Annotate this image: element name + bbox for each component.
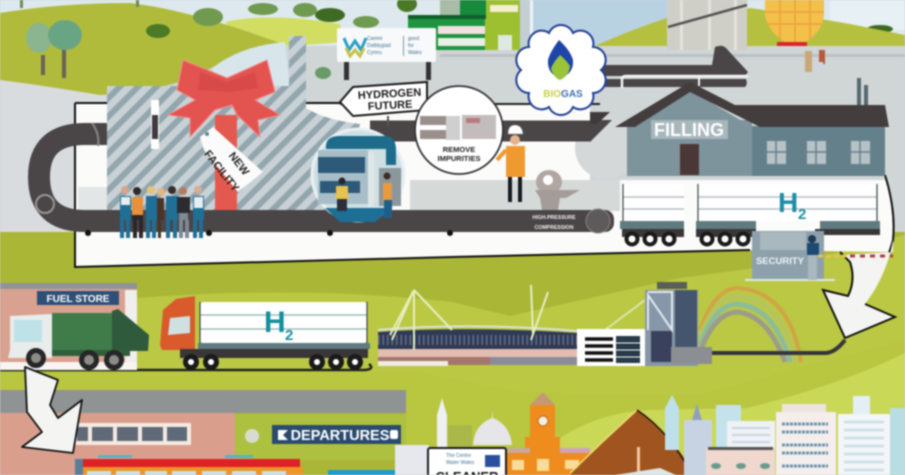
factory: hatched new facility wrapped as gift [107, 36, 360, 210]
pipe joints and valves [36, 123, 614, 236]
gift tag: new facility: NEW [226, 150, 251, 178]
logo sign: water company: for [408, 43, 414, 49]
sign: hydrogen future [340, 82, 427, 126]
bin lorry [8, 309, 149, 368]
big white arrow left [22, 367, 82, 453]
person 1 [120, 186, 131, 238]
tube trailers with H2: 2 [798, 206, 806, 223]
wheels [186, 356, 360, 368]
guard [807, 235, 819, 280]
hydrogen tube truck: H [264, 306, 286, 339]
person 2 [132, 187, 143, 238]
hills top left [0, 3, 345, 95]
stadium [378, 285, 645, 366]
brown sail roof [570, 410, 695, 475]
ribbon [215, 115, 237, 210]
sign: cleaner: Water Wales [446, 460, 475, 466]
compressor machine: COMPRESSION [535, 225, 574, 231]
tower building [645, 282, 712, 366]
circle inset: remove impurities [415, 86, 503, 174]
person 7 [193, 186, 204, 238]
tube trailers with H2: H [778, 187, 798, 218]
logo sign: water company: Wales [408, 50, 422, 56]
rainbow [700, 288, 801, 362]
barrier [818, 254, 893, 258]
top right hills, tower and balloon [595, 0, 905, 73]
sign: departures: DEPARTURES [291, 428, 390, 444]
person 3 [146, 186, 157, 238]
sign: cleaner: The Centre [446, 453, 471, 459]
circle inset: remove impurities: REMOVE [443, 145, 475, 154]
staff group [120, 186, 204, 238]
logo sign: water company: Cymru [367, 50, 382, 56]
wheels [28, 350, 122, 368]
logo sign: water company: Datblygiad [367, 43, 391, 49]
green building top [408, 0, 533, 50]
security gatehouse: SECURITY [756, 256, 805, 267]
hydrogen tube truck [160, 296, 370, 368]
gift tag: new facility: FACILITY [201, 148, 241, 195]
bus [75, 455, 303, 475]
wheels [626, 234, 748, 244]
people on path [805, 50, 825, 73]
filling station building: FILLING [654, 120, 724, 140]
bus depot [0, 390, 416, 475]
sign: departures [272, 425, 401, 444]
biogas cloud badge: BIOGAS [543, 89, 583, 100]
city skyline: landmarks [395, 392, 905, 475]
filling station building [615, 78, 889, 176]
person 6 [177, 187, 190, 238]
person 5 [166, 186, 178, 238]
sign: hydrogen future: FUTURE [368, 99, 413, 113]
gift tag: new facility [200, 127, 263, 195]
logo sign: water company [337, 28, 436, 80]
compressor machine [532, 170, 580, 231]
sign: hydrogen future: HYDROGEN [358, 87, 422, 102]
clock tower [505, 392, 595, 475]
compressor machine: HIGH-PRESSURE [532, 215, 576, 221]
tube trailers with H2 [620, 184, 880, 244]
sign: fuel store: FUEL STORE [47, 294, 110, 305]
arrow: dark pipe to filling [590, 46, 748, 124]
biogas cloud badge [516, 25, 606, 115]
icon: flame [548, 40, 573, 80]
trees and bushes [20, 0, 893, 79]
big white arrow right [823, 240, 895, 338]
pipe loop: dark gas pipeline [39, 120, 612, 221]
circle inset: remove impurities: IMPURITIES [438, 154, 480, 163]
red bow [168, 60, 280, 137]
city buildings [665, 395, 905, 475]
engineer figure [497, 125, 525, 202]
sign: cleaner [428, 448, 506, 475]
road line [0, 364, 371, 370]
pipe line to arrow [712, 340, 845, 353]
fuel store building [0, 283, 137, 370]
logo sign: water company: Cwmni [367, 36, 382, 42]
person 4 [157, 188, 165, 238]
frame: white process area [75, 103, 894, 300]
icon: hot air balloon [765, 0, 824, 46]
logo sign: water company: good [408, 36, 419, 42]
security gatehouse [745, 231, 893, 281]
white office block [577, 329, 645, 366]
circle inset: electrolyser operators [312, 129, 404, 222]
hydrogen tube truck: 2 [285, 327, 293, 344]
